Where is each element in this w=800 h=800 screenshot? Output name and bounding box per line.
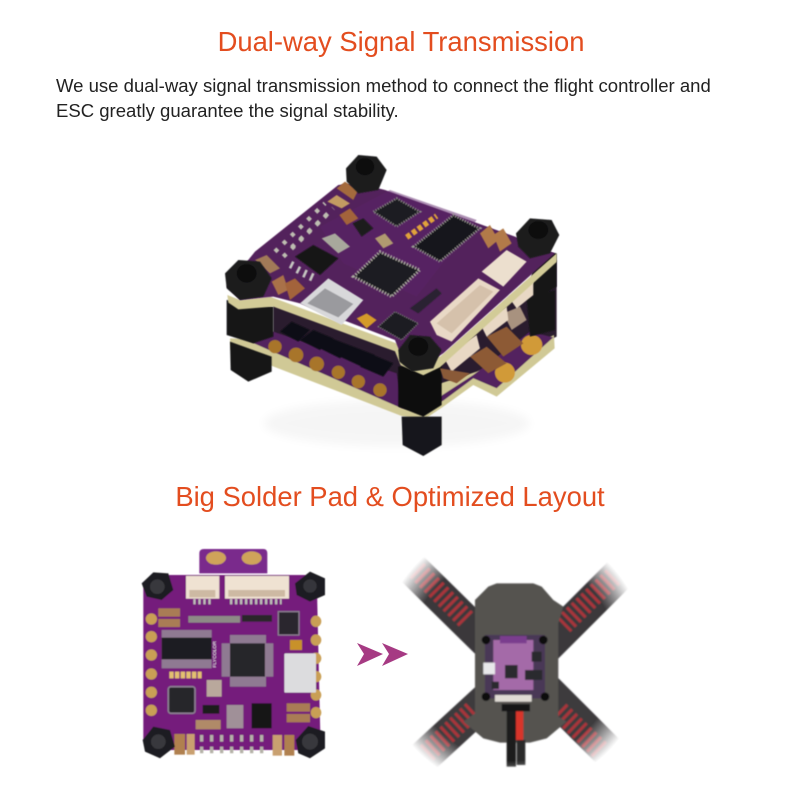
silkscreen text: FLYCOLOR [212,641,218,668]
title: dual-way signal transmission: Dual-way Signal Transmission [218,26,584,57]
gold pads row [169,665,202,685]
header pin holes [275,203,333,257]
capacitors [158,608,310,756]
carbon plate [463,583,567,743]
frame arms [400,557,630,767]
chips [162,612,299,728]
white connectors [186,576,289,602]
photo: top view of flight controller board [142,549,325,758]
nylon nuts [225,155,559,372]
body text: We use dual-way signal transmission method to connect the flight controller and [56,75,711,96]
MOSFET row [280,322,393,377]
tactile button [357,313,377,328]
illustrations canvas [141,154,627,768]
white connectors on top [430,250,527,342]
heading: big solder pad and optimized layout: Big Solder Pad & Optimized Layout [175,481,605,512]
photo: stacked flight controller and ESC [225,155,559,456]
black standoffs [227,250,557,456]
body text: ESC greatly guarantee the signal stability. [56,100,399,121]
connectors and capacitors at right side [440,282,533,383]
pads strip [407,216,437,237]
mounting grommets [142,572,325,758]
arrow icon: double chevron [357,643,408,666]
photo: controller mounted in quadcopter frame [400,557,630,767]
button [290,640,302,650]
top board edge [227,253,557,375]
capacitors [255,182,512,300]
chips on top board [290,198,480,340]
micro USB port [300,278,363,325]
micro USB [284,653,316,693]
lower board [230,332,555,420]
mounted board [485,635,545,698]
body text [56,75,711,121]
battery lead [507,710,516,767]
side solder pads [146,613,321,718]
pin header [200,738,270,750]
shadow [263,400,530,447]
ESC tab with solder pads [199,549,267,573]
top board [227,183,555,367]
dark backing between the boards [273,260,557,403]
pcb [143,575,321,750]
